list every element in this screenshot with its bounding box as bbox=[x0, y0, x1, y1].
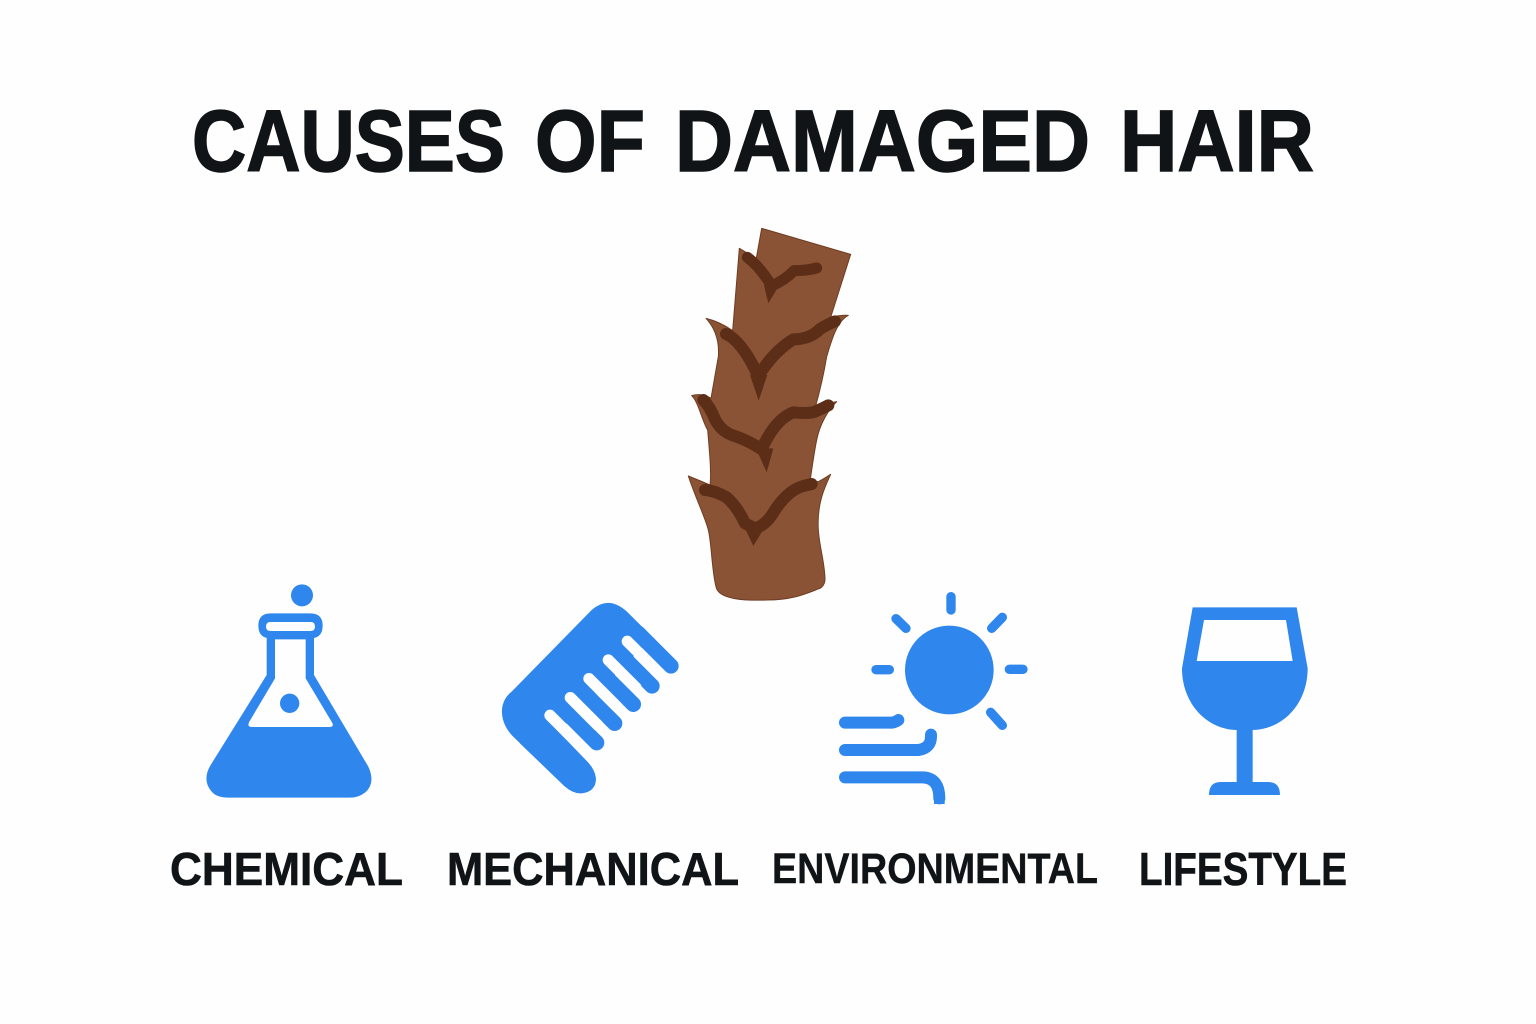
crack: fourth scale bbox=[705, 484, 812, 546]
crack: second scale bbox=[726, 321, 835, 401]
title: HAIR bbox=[1120, 93, 1314, 190]
title: OF bbox=[535, 93, 645, 190]
icon: mechanical comb bbox=[502, 603, 671, 793]
label: lifestyle: LIFESTYLE bbox=[1139, 843, 1347, 895]
flask body with liquid bbox=[206, 635, 371, 798]
title: CAUSES bbox=[192, 93, 505, 190]
icon: chemical flask bbox=[206, 584, 371, 798]
comb teeth bbox=[564, 633, 671, 743]
flask droplet above the neck bbox=[291, 584, 313, 606]
wind lines bbox=[845, 720, 939, 804]
crack: third scale bbox=[703, 400, 828, 472]
crack: top scale bbox=[747, 257, 817, 303]
sun disc bbox=[905, 626, 994, 714]
label: environmental: ENVIRONMENTAL bbox=[772, 845, 1098, 893]
icon: lifestyle wine glass bbox=[1182, 607, 1308, 795]
flask stopper ring bbox=[258, 613, 323, 638]
hair shaft with lifted cuticle scales bbox=[688, 228, 851, 600]
gaps between comb teeth bbox=[550, 641, 655, 735]
label: chemical: CHEMICAL bbox=[170, 843, 403, 895]
sun rays bbox=[876, 597, 1023, 725]
icon: environmental sun and wind bbox=[845, 597, 1023, 804]
label: mechanical: MECHANICAL bbox=[447, 843, 739, 895]
illustration: damaged hair strand bbox=[688, 228, 851, 600]
comb spine and wide end tooth bbox=[502, 603, 653, 793]
title: DAMAGED bbox=[675, 93, 1090, 190]
comb wide tooth root bbox=[520, 717, 588, 787]
flask bubble bbox=[280, 694, 299, 713]
